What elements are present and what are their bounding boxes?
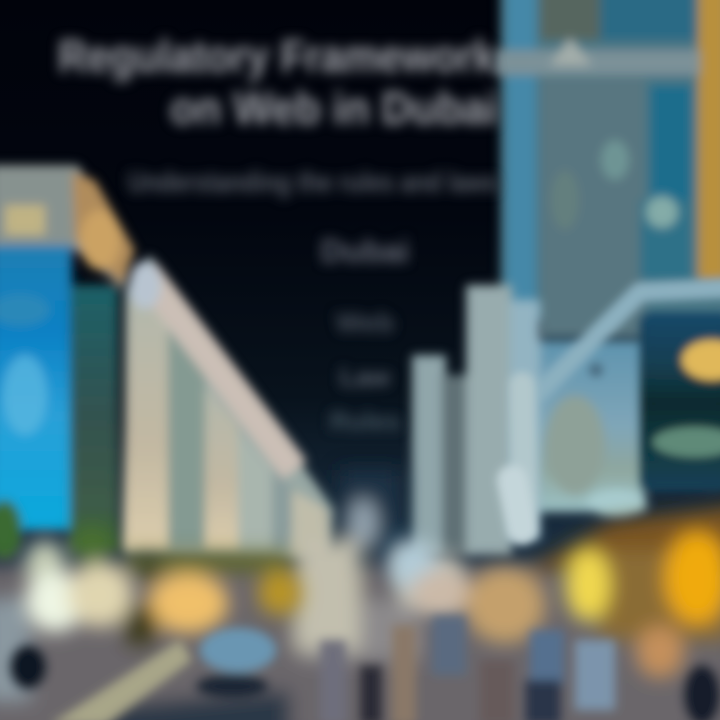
street: crowd and vehicles xyxy=(10,615,720,720)
label: fourth word: Rules xyxy=(330,406,400,436)
street: ground level xyxy=(0,470,720,720)
building: left corner block xyxy=(0,165,135,560)
building: left perspective row xyxy=(122,255,335,560)
building: right glass tower xyxy=(495,0,720,338)
subtitle: Understanding the rules and laws xyxy=(128,166,498,199)
label: second word: Web xyxy=(336,307,394,338)
label: first word: Dubai xyxy=(321,233,409,269)
street: left shopfront lights xyxy=(25,525,302,647)
title line 1: Regulatory Framework xyxy=(58,30,496,82)
title line 2: on Web in Dubai xyxy=(170,82,498,134)
building: mid distance towers xyxy=(412,285,647,555)
title xyxy=(58,30,498,134)
label: third word: Law xyxy=(340,362,391,392)
street: right shopfront lights xyxy=(389,505,720,678)
center text column xyxy=(321,233,409,436)
building: elevated walkway xyxy=(512,288,720,530)
billboard: right dark sign xyxy=(640,312,720,492)
